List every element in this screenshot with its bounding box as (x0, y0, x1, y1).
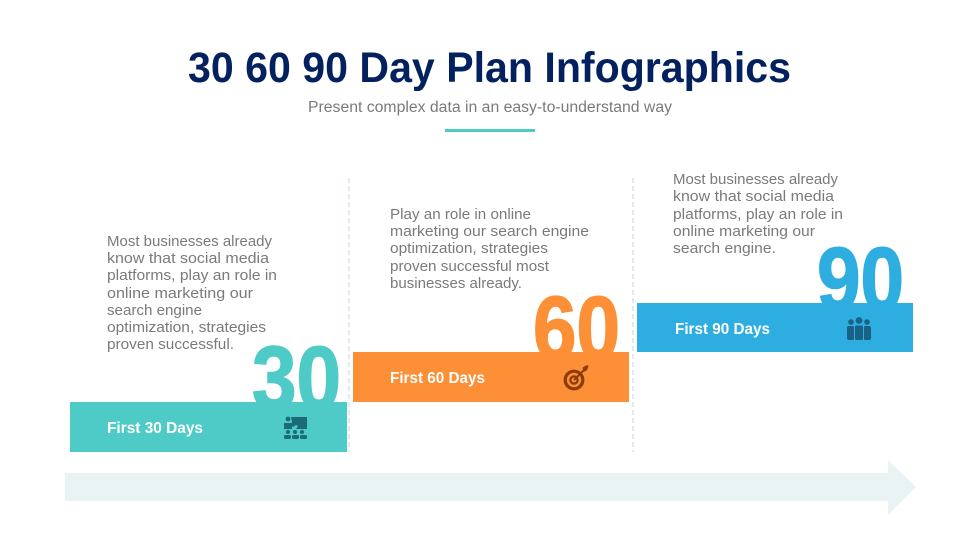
text block: 30 days: Most businesses already (107, 234, 273, 250)
text block: 60 days (390, 207, 589, 292)
number: 90: 90 (817, 230, 904, 330)
number: 30: 30 (252, 329, 341, 429)
bar label: first 90 days: First 90 Days (675, 321, 770, 338)
bar: first 90 days (637, 303, 913, 352)
panel: first 60 days (353, 207, 629, 402)
text block: 90 days (673, 172, 843, 257)
panel: first 30 days (70, 234, 347, 452)
icon: team of people (847, 317, 871, 340)
title: 30 60 90 Day Plan Infographics (188, 44, 791, 92)
text block: 90 days: search engine. (673, 241, 776, 257)
bar label: first 30 days: First 30 Days (107, 420, 203, 437)
icon: presenter and audience (284, 417, 307, 439)
bar: first 60 days (353, 352, 629, 402)
text block: 30 days: proven successful. (107, 337, 234, 353)
text block: 30 days: platforms, play an role in (107, 268, 277, 284)
text block: 60 days: Play an role in online (390, 207, 531, 223)
text block: 60 days: proven successful most (390, 259, 549, 275)
text block: 60 days: optimization, strategies (390, 241, 548, 257)
text block: 90 days: online marketing our (673, 224, 815, 240)
number: 60: 60 (533, 279, 620, 379)
text block: 90 days: Most businesses already (673, 172, 839, 188)
panel: first 90 days (637, 172, 913, 352)
icon: target with arrow (565, 366, 588, 389)
text block: 30 days: know that social media (107, 251, 269, 267)
subtitle: Present complex data in an easy-to-understand way (308, 99, 672, 116)
bar label: first 60 days: First 60 Days (390, 370, 485, 387)
text block: 30 days (107, 234, 277, 353)
text block: 60 days: marketing our search engine (390, 224, 589, 240)
text block: 30 days: search engine (107, 303, 202, 319)
arrow: timeline (65, 460, 916, 515)
title underline (445, 129, 535, 132)
text block: 90 days: know that social media (673, 189, 834, 205)
text block: 30 days: online marketing our (107, 286, 253, 302)
bar: first 30 days (70, 402, 347, 452)
text block: 60 days: businesses already. (390, 276, 522, 292)
text block: 90 days: platforms, play an role in (673, 207, 843, 223)
text block: 30 days: optimization, strategies (107, 320, 266, 336)
